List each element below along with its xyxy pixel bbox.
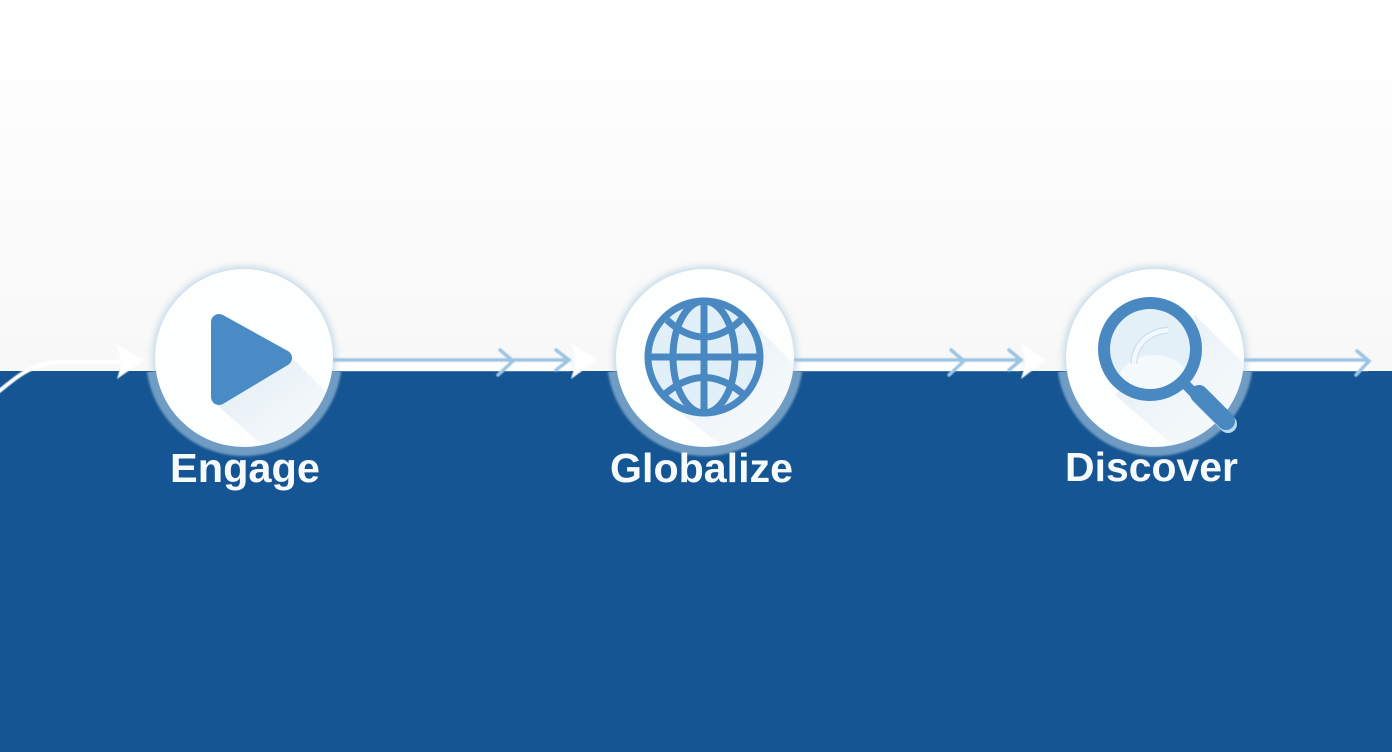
icon shadow: Globalize <box>676 323 794 446</box>
label: Globalize: Globalize <box>610 445 793 491</box>
icon shadow: Engage <box>218 358 326 445</box>
background: blue lower area <box>0 371 1392 752</box>
icon: globe <box>648 301 760 413</box>
circle: Engage <box>155 269 333 447</box>
halo: Globalize <box>607 260 803 456</box>
connector: curved white entry arrow <box>0 344 144 392</box>
label: Discover: Discover <box>1065 444 1238 490</box>
label: Engage: Engage <box>170 445 320 491</box>
circle: Globalize <box>616 269 794 447</box>
background: light upper area <box>0 0 1392 372</box>
icon: play triangle <box>219 322 284 397</box>
icon shadow: Discover <box>1115 315 1244 445</box>
icon: magnifying glass <box>1104 303 1228 424</box>
halo: Discover <box>1057 260 1253 456</box>
step: Discover <box>1056 263 1254 482</box>
connector: final arrow after Discover <box>1240 351 1369 375</box>
connector: arrows from Globalize to Discover <box>790 344 1046 379</box>
connector: arrows from Engage to Globalize <box>330 344 597 379</box>
infographic: three step process <box>0 261 1392 752</box>
step: Engage <box>146 260 350 491</box>
halo: Engage <box>146 260 342 456</box>
step: Globalize <box>606 263 804 482</box>
circle: Discover <box>1066 269 1244 447</box>
